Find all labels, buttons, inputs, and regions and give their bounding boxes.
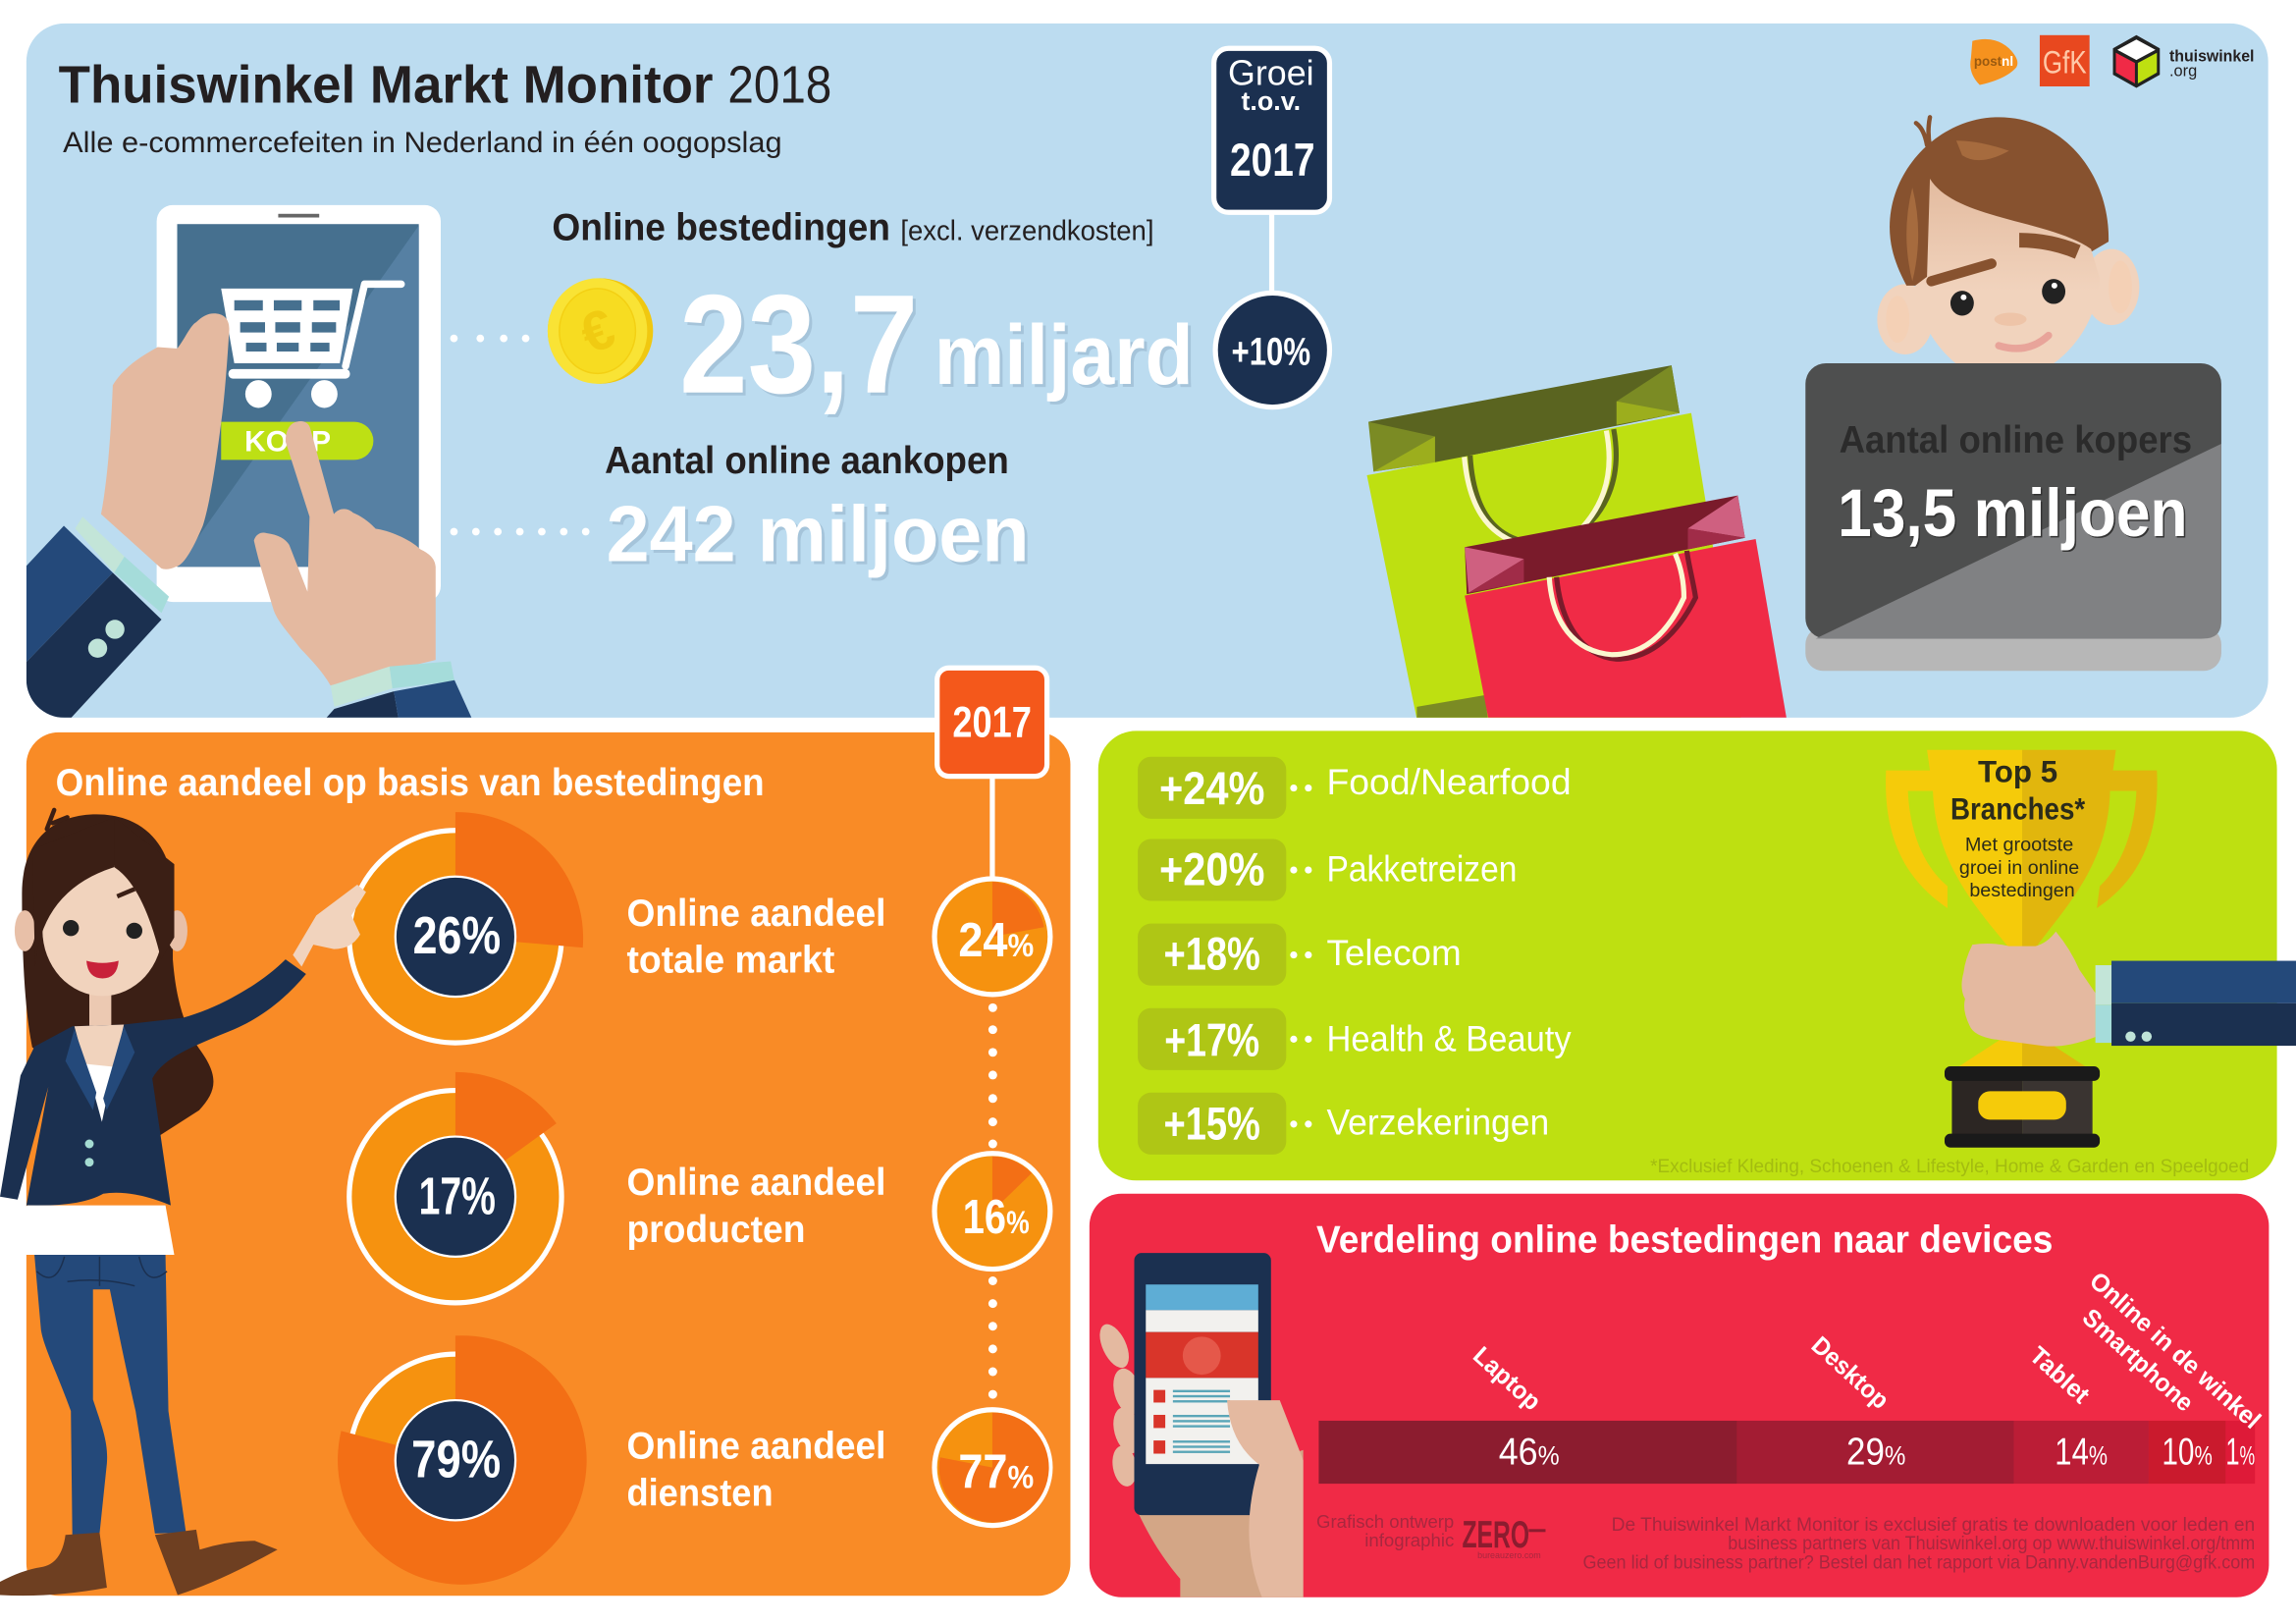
2017 badge — [937, 668, 1047, 777]
value: 23,7 miljard: 23,7 — [679, 266, 918, 423]
pie: 16% in 2017: 16% — [963, 1190, 1030, 1244]
boy head — [1877, 117, 2139, 366]
laptop: 13,5 miljoen — [1838, 475, 2188, 551]
design credit — [1316, 1511, 1545, 1560]
row: Pakketreizen: +20% — [1159, 844, 1264, 896]
growth badge: Groei — [1228, 54, 1314, 93]
icon: shopping cart — [221, 284, 401, 407]
label: services: Online aandeel — [626, 1426, 885, 1468]
panel: online spending header — [27, 24, 2269, 719]
label: services — [626, 1426, 885, 1514]
segment: smartphone 10%: 10% — [2162, 1432, 2213, 1474]
illustration: trophy with hand — [1886, 750, 2296, 1148]
row: Food/Nearfood: +24% — [1159, 763, 1264, 815]
heading: Online aandeel op basis van bestedingen — [56, 762, 765, 804]
red bag — [1465, 496, 1787, 718]
row: Verzekeringen — [1138, 1093, 1549, 1155]
growth badge: t.o.v. — [1241, 86, 1301, 116]
footer note: Geen lid of business partner? Bestel dan het rapport via Danny.vandenBurg@gfk.com — [1583, 1552, 2255, 1574]
row: Pakketreizen: Pakketreizen — [1326, 848, 1517, 890]
illustration: phone in hand — [1094, 1253, 1304, 1597]
subtitle: Alle e-commercefeiten in Nederland in één oogopslag — [63, 127, 782, 159]
logo: postnl — [1970, 39, 2017, 85]
design credit: Grafisch ontwerp — [1316, 1511, 1454, 1532]
green bag — [1367, 365, 1741, 719]
donut: 17% — [349, 1072, 561, 1303]
segment: laptop 46%: 46% — [1499, 1432, 1560, 1474]
logo: postnl: postnl — [1974, 54, 2013, 69]
title year: 2018 — [727, 55, 831, 114]
footer note: De Thuiswinkel Markt Monitor is exclusief gratis te downloaden voor leden en — [1612, 1514, 2255, 1536]
axis label: Smartphone: Smartphone — [2077, 1304, 2199, 1417]
dotted connector: purchases — [451, 528, 590, 535]
axis label: Tablet: Tablet — [2024, 1341, 2095, 1410]
row: Health & Beauty: Health & Beauty — [1326, 1017, 1572, 1058]
label: total market — [626, 893, 885, 981]
segment: desktop 29%: 29% — [1846, 1432, 1905, 1474]
axis label: Online in de winkel: Online in de winkel — [2084, 1267, 2266, 1435]
heading: Verdeling online bestedingen naar devices — [1316, 1218, 2053, 1261]
value: 23,7 miljard: miljard — [934, 308, 1194, 403]
illustration: woman pointing — [0, 810, 366, 1596]
logo: GfK: GfK — [2043, 44, 2087, 81]
label: products — [626, 1162, 885, 1251]
segment: laptop 46% — [1318, 1421, 1736, 1484]
design credit: infographic — [1364, 1530, 1454, 1550]
row: Verzekeringen: +15% — [1163, 1099, 1260, 1151]
value: 23,7 miljard — [679, 266, 1194, 423]
trophy text: bestedingen — [1969, 880, 2075, 901]
trophy text: groei in online — [1959, 857, 2079, 879]
segment: tablet 14%: 14% — [2055, 1432, 2108, 1474]
design credit: bureauzero.com — [1477, 1550, 1541, 1560]
trophy text: Branches* — [1950, 792, 2086, 827]
panel: devices — [1090, 1194, 2269, 1597]
row: Food/Nearfood — [1138, 757, 1572, 819]
donut: 26%: 26% — [413, 906, 501, 965]
logo: thuiswinkel.org: thuiswinkel — [2169, 48, 2254, 66]
trophy text — [1950, 755, 2086, 901]
laptop: Aantal online kopers — [1840, 419, 2192, 461]
donut: 79%: 79% — [411, 1430, 501, 1489]
row: Food/Nearfood: Food/Nearfood — [1326, 761, 1572, 802]
segment: tablet 14% — [2014, 1421, 2149, 1484]
icon: euro coin — [548, 278, 653, 384]
label: total market: totale markt — [626, 939, 834, 981]
donut: 17%: 17% — [419, 1167, 496, 1226]
footer note — [1583, 1514, 2255, 1574]
row: Telecom: Telecom — [1326, 932, 1462, 973]
panel: top 5 branches — [1098, 731, 2296, 1180]
label: products: producten — [626, 1209, 805, 1251]
row: Health & Beauty: +17% — [1164, 1015, 1259, 1067]
icon: tablet with cart and hands — [27, 205, 471, 718]
row: Pakketreizen — [1138, 839, 1517, 901]
label: total market: Online aandeel — [626, 893, 885, 935]
pie: 77% in 2017 — [934, 1410, 1050, 1526]
label: services: diensten — [626, 1472, 774, 1514]
growth badge: +10% — [1232, 329, 1310, 373]
label note: [excl. verzendkosten] — [900, 216, 1153, 247]
value: 242 miljoen: 242 miljoen — [607, 490, 1030, 578]
design credit: ZERO — [1462, 1514, 1529, 1556]
growth badge — [1214, 48, 1329, 407]
pie: 24% in 2017: 24% — [958, 913, 1034, 967]
segment: in store 1%: 1% — [2225, 1432, 2255, 1474]
stacked bar chart — [1318, 1421, 2255, 1484]
segment: desktop 29% — [1736, 1421, 2014, 1484]
logo: thuiswinkel.org — [2113, 35, 2254, 88]
donut: 79% — [338, 1335, 587, 1585]
2017 badge: 2017 — [952, 697, 1032, 746]
buy button: KOOP — [244, 425, 331, 458]
axis label: Desktop: Desktop — [1806, 1331, 1894, 1415]
illustration: shopping bags — [1367, 365, 1787, 719]
label: online spending: Online bestedingen — [552, 207, 890, 249]
trophy text: Met grootste — [1965, 835, 2073, 856]
icon: euro coin: € — [572, 298, 623, 366]
trophy text: Top 5 — [1978, 755, 2057, 789]
pie: 16% in 2017 — [934, 1154, 1050, 1270]
row: Health & Beauty — [1138, 1008, 1572, 1070]
segment: in store 1% — [2225, 1421, 2255, 1484]
panel: online share — [0, 668, 1070, 1596]
row: Telecom: +18% — [1163, 929, 1260, 981]
label: products: Online aandeel — [626, 1162, 885, 1204]
label: number of purchases: Aantal online aankopen — [605, 440, 1009, 482]
title: Thuiswinkel Markt Monitor — [59, 55, 714, 114]
row: Verzekeringen: Verzekeringen — [1326, 1101, 1549, 1142]
logo: GfK — [2040, 35, 2090, 86]
buy button — [221, 422, 373, 460]
dotted connector: spending — [451, 335, 529, 342]
pie: 24% in 2017 — [934, 879, 1050, 995]
segment: smartphone 10% — [2149, 1421, 2225, 1484]
growth badge: 2017 — [1230, 135, 1315, 187]
axis label: Laptop: Laptop — [1468, 1341, 1546, 1416]
row: Telecom — [1138, 924, 1462, 986]
laptop — [1805, 363, 2221, 671]
illustration: boy behind laptop — [1805, 117, 2221, 671]
connector line and dots — [988, 777, 997, 1399]
donut: 26% — [349, 812, 583, 1043]
logo: thuiswinkel.org: .org — [2169, 63, 2197, 81]
pie: 77% in 2017: 77% — [958, 1445, 1034, 1499]
footer note: business partners van Thuiswinkel.org op www.thuiswinkel.org/tmm — [1728, 1533, 2255, 1554]
footnote: *Exclusief Kleding, Schoenen & Lifestyle, Home & Garden en Speelgoed — [1650, 1156, 2249, 1177]
